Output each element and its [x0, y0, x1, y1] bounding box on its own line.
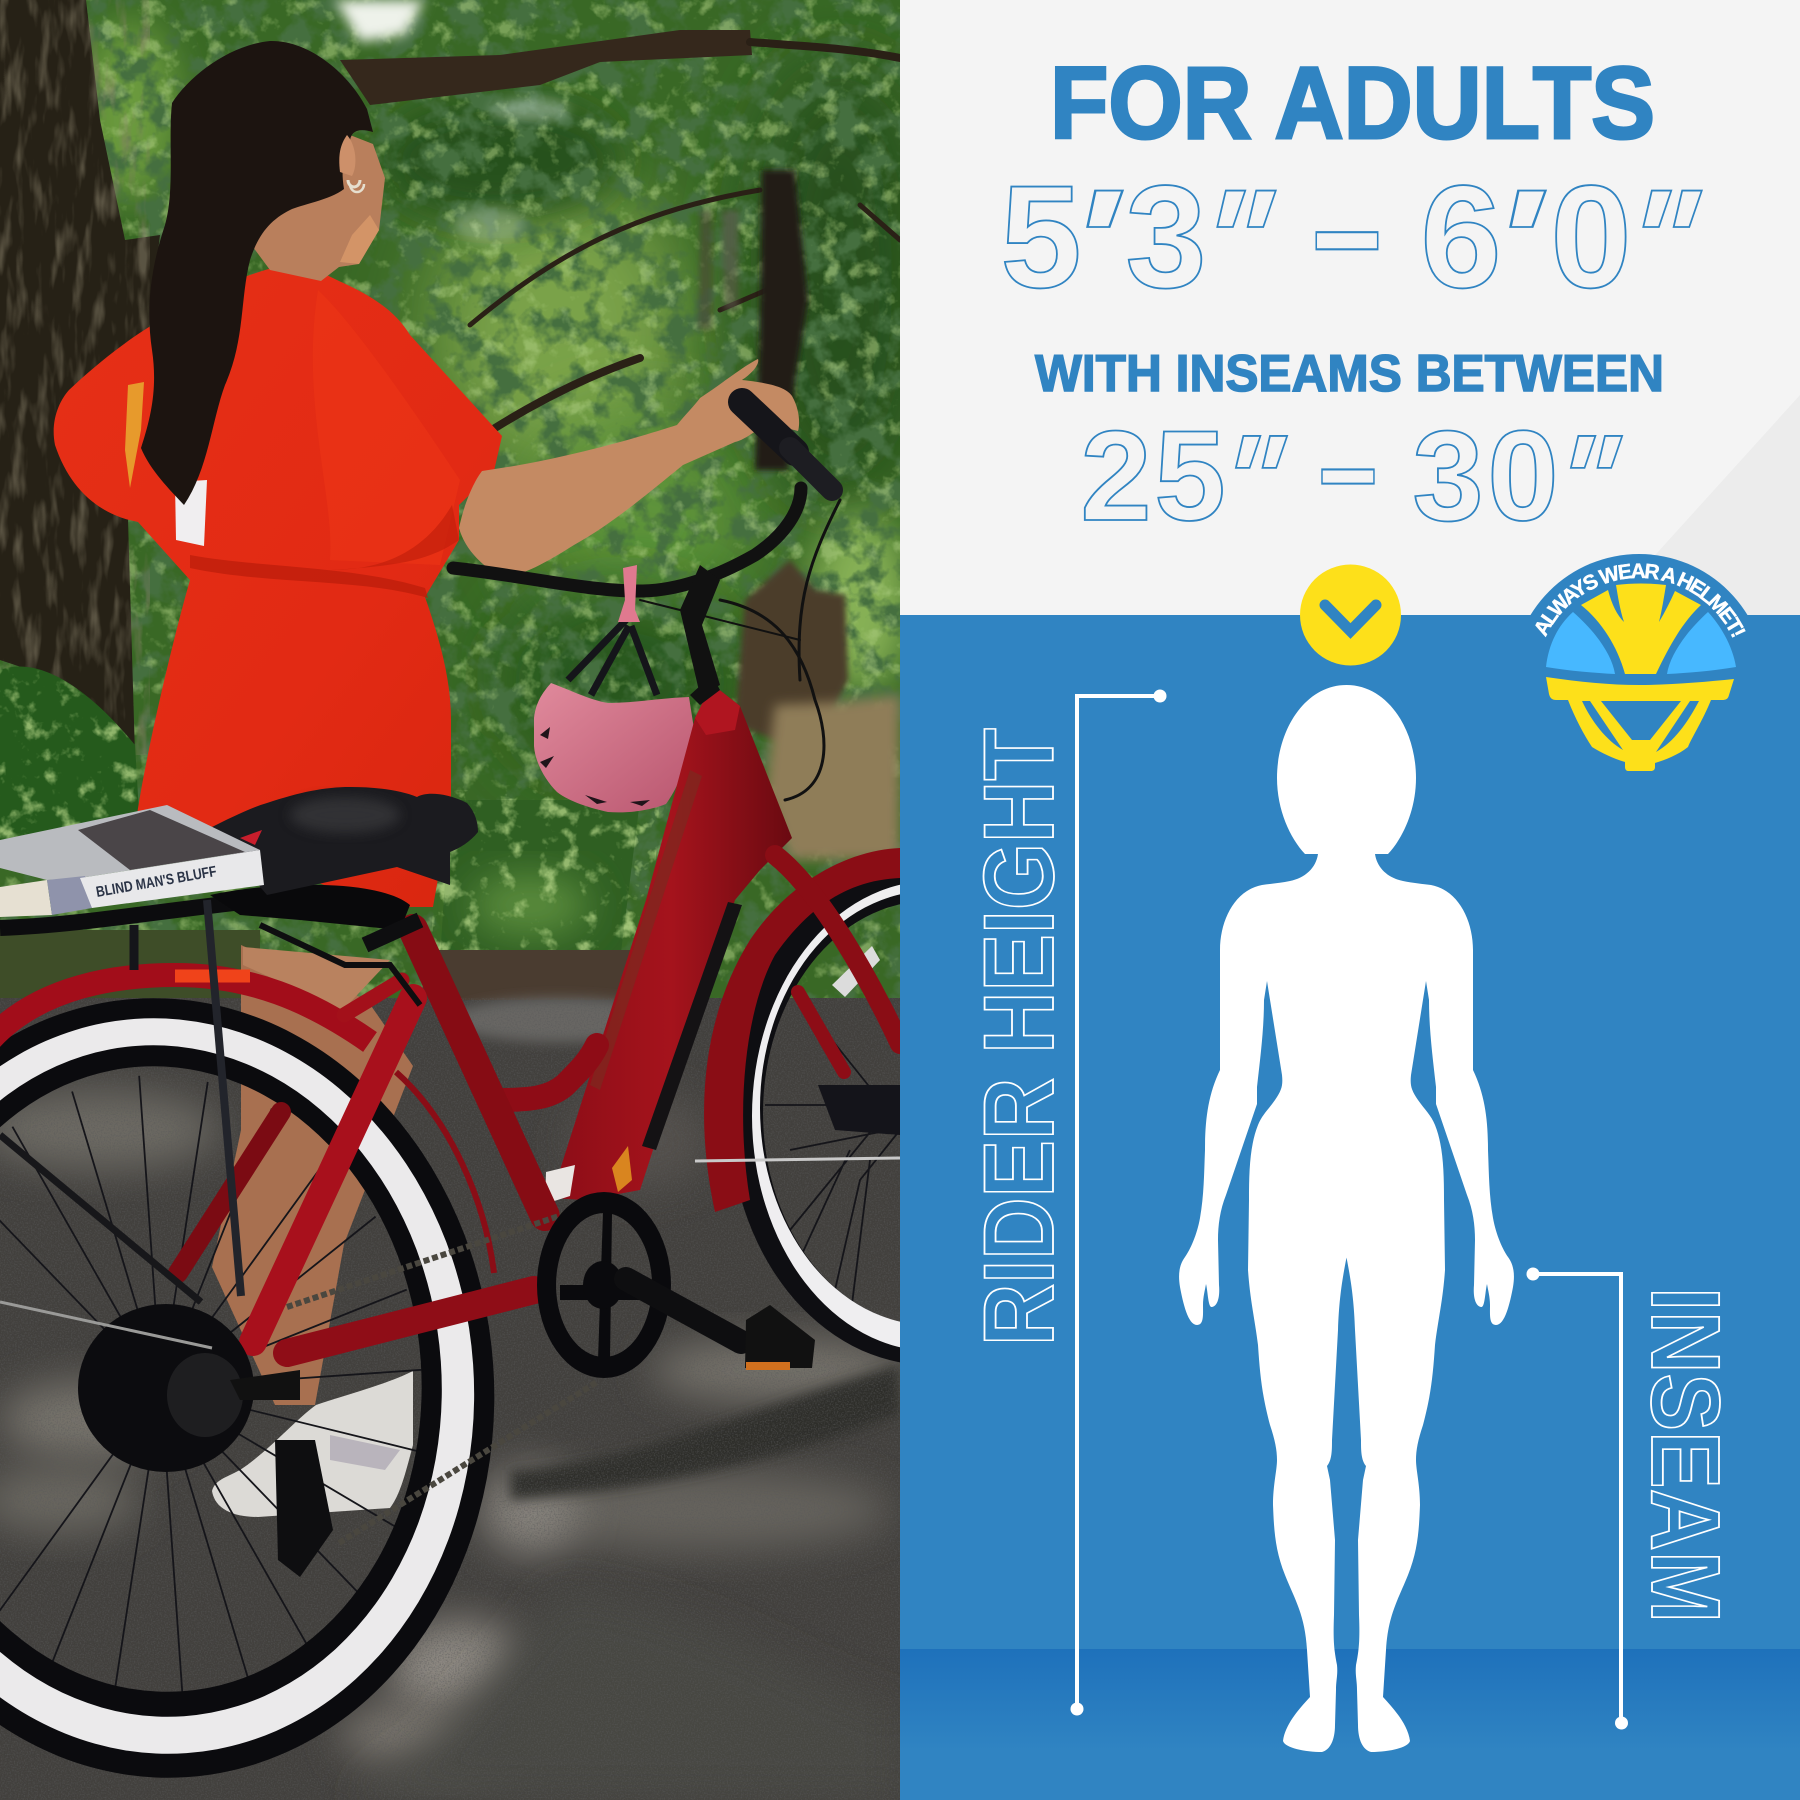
main tree trunk	[0, 0, 160, 755]
inseam range: 0	[1487, 405, 1559, 548]
crankset and pedal	[537, 1192, 815, 1378]
panel: blue measurement panel	[900, 554, 1800, 1800]
dirt path ground	[765, 695, 900, 860]
inseam range: 2	[1080, 405, 1152, 548]
rear fender	[0, 975, 494, 1273]
woman's leg and shoe	[212, 945, 413, 1517]
rear wheel	[0, 976, 520, 1800]
front wheel	[729, 861, 1129, 1365]
rider height range: –	[1312, 131, 1382, 324]
rear rack, struts and cables	[0, 885, 420, 1348]
right tree trunk	[698, 170, 848, 745]
rider height range: 6	[1420, 155, 1502, 318]
front fender	[704, 848, 900, 1212]
inseam label: INSEAM	[1631, 1287, 1740, 1623]
inseam range: "	[1202, 408, 1304, 551]
inseam range	[1080, 385, 1639, 551]
inseam range: 5	[1154, 405, 1226, 548]
inseam bracket	[1526, 1268, 1628, 1730]
icon: yellow chevron circle	[1300, 564, 1401, 666]
helmet side vents	[1546, 612, 1736, 674]
asphalt path	[0, 950, 910, 1800]
woman's arm and hand	[459, 359, 799, 577]
badge arc text	[1536, 578, 1742, 681]
book on the rear rack	[0, 805, 264, 917]
helmet hanging from handlebar	[534, 565, 694, 812]
rider height label: RIDER HEIGHT	[963, 728, 1074, 1346]
rider height bracket	[1070, 690, 1166, 1716]
helmet top yellow	[1581, 584, 1701, 674]
icon: always wear a helmet badge	[1530, 554, 1748, 771]
person silhouette	[1179, 685, 1514, 1752]
bike stem	[680, 565, 720, 695]
inseam range: 3	[1412, 405, 1484, 548]
book title: BLIND MAN'S BLUFF	[95, 863, 218, 901]
forest background	[0, 0, 930, 1000]
subheading: with inseams between: WITH INSEAMS BETWEEN	[1035, 345, 1664, 403]
bike saddle	[210, 787, 478, 895]
chain	[287, 1213, 597, 1543]
rear hub and cassette	[78, 1304, 333, 1577]
heading: for adults: FOR ADULTS	[1050, 46, 1655, 160]
panel: bike photograph	[0, 0, 900, 1800]
rider height range: "	[1604, 159, 1721, 322]
woman's head and hair	[141, 41, 385, 505]
floor band	[900, 1649, 1800, 1751]
handlebar and grip	[453, 402, 840, 800]
rider height range: 3	[1125, 155, 1207, 318]
helmet lower yellow frame	[1546, 677, 1734, 771]
rider height range: 0	[1550, 155, 1632, 318]
panel: top information panel	[900, 0, 1800, 616]
icon: always wear a helmet badge: ALWAYS WEAR A HELMET!	[1535, 563, 1746, 638]
woman's dress	[54, 264, 502, 907]
undergrowth plants	[0, 650, 660, 1030]
tree branches	[340, 30, 900, 428]
inseam range: –	[1319, 385, 1377, 546]
bike frame	[178, 675, 900, 1353]
rider height range	[1000, 131, 1721, 324]
rider height range: '	[1047, 160, 1142, 323]
inseam range: "	[1537, 408, 1639, 551]
rider height range: "	[1178, 159, 1295, 322]
rider height range: 5	[1000, 155, 1082, 318]
rider height range: '	[1470, 160, 1565, 323]
